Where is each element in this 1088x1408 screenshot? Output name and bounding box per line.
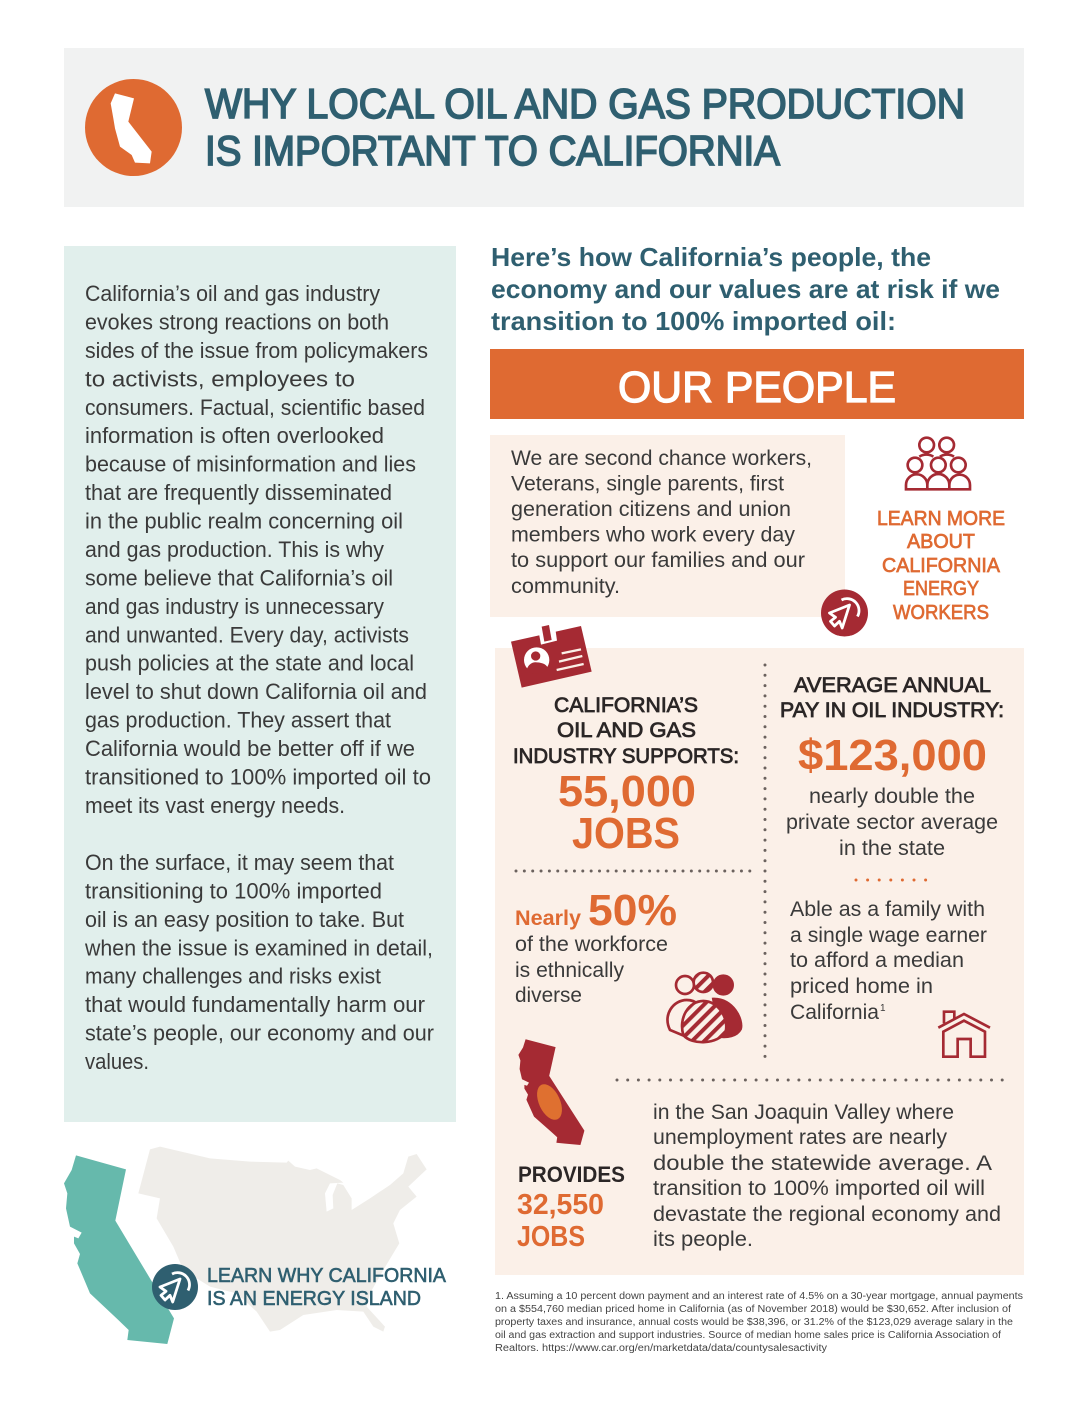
- icon: link arrow: [821, 590, 868, 636]
- panel: who we are: [490, 435, 845, 617]
- stat: nearly 50 percent diverse: diverse: [515, 984, 582, 1007]
- text block: San Joaquin Valley: its people.: [653, 1228, 753, 1251]
- banner: our people: OUR PEOPLE: [618, 363, 896, 412]
- text block: first paragraph: California would be better off if we: [85, 736, 415, 761]
- text block: second paragraph: On the surface, it may seem that: [85, 850, 394, 875]
- panel: statistics: [495, 625, 1024, 1275]
- text block: second paragraph: state’s people, our economy and our: [85, 1021, 434, 1046]
- text block: San Joaquin Valley: in the San Joaquin Valley where: [653, 1101, 954, 1124]
- footnote: Realtors. https://www.car.org/en/marketdata/data/countysalesactivity: [495, 1343, 827, 1354]
- text block: second paragraph: values.: [85, 1049, 149, 1074]
- icon: link arrow: [152, 1264, 198, 1310]
- text block: second paragraph: when the issue is examined in detail,: [84, 935, 433, 960]
- stat: 55,000 jobs: CALIFORNIA’S: [554, 694, 698, 717]
- text block: first paragraph: in the public realm concerning oil: [85, 508, 403, 534]
- callout: learn more link: CALIFORNIA: [882, 555, 1001, 577]
- text block: San Joaquin Valley: unemployment rates are nearly: [653, 1126, 948, 1149]
- stat: 55,000 jobs: [513, 694, 739, 858]
- callout: learn more link: ABOUT: [907, 531, 975, 553]
- icon: California in orange circle: [85, 79, 182, 176]
- stat: nearly 50 percent diverse: [515, 886, 677, 1007]
- callout: energy island link: LEARN WHY CALIFORNIA: [207, 1264, 446, 1287]
- stat: 32,550 jobs: [517, 1162, 625, 1253]
- text block: first paragraph: transitioned to 100% imported oil to: [85, 764, 431, 790]
- panel: who we are: We are second chance workers,: [511, 447, 812, 470]
- panel: who we are: Veterans, single parents, first: [511, 472, 784, 496]
- panel: who we are: community.: [511, 575, 620, 598]
- text block: first paragraph: evokes strong reactions on both: [85, 309, 389, 334]
- header panel: [64, 48, 1024, 207]
- callout: learn more link: WORKERS: [893, 602, 989, 624]
- text block: first paragraph: and gas production. This is why: [85, 537, 384, 562]
- panel: intro text: [64, 246, 456, 1122]
- text block: second paragraph: oil is an easy position to take. But: [85, 907, 404, 932]
- text block: first paragraph: to activists, employees to: [85, 366, 355, 391]
- text block: San Joaquin Valley: devastate the regional economy and: [653, 1203, 1001, 1226]
- stat: average annual pay: $123,000: [798, 731, 987, 780]
- text block: San Joaquin Valley: double the statewide average. A: [653, 1152, 992, 1175]
- stat: average annual pay: [780, 674, 1004, 860]
- stat: 32,550 jobs: 32,550: [517, 1189, 604, 1221]
- callout: energy island link: [207, 1264, 446, 1310]
- footnote: [495, 1291, 1023, 1354]
- text block: first paragraph: because of misinformation and lies: [85, 452, 416, 477]
- stat: average annual pay: nearly double the: [809, 785, 975, 808]
- heading: people, economy and values at risk: transition to 100% imported oil:: [491, 306, 896, 336]
- text block: afford a home: a single wage earner: [790, 924, 987, 947]
- stat: 55,000 jobs: JOBS: [572, 809, 680, 858]
- text block: first paragraph: meet its vast energy needs.: [85, 793, 345, 818]
- text block: second paragraph: that would fundamentally harm our: [85, 992, 425, 1017]
- stat: nearly 50 percent diverse: Nearly: [515, 907, 581, 930]
- text block: first paragraph: push policies at the state and local: [85, 651, 414, 676]
- title: IS IMPORTANT TO CALIFORNIA: [205, 127, 780, 174]
- text block: second paragraph: transitioning to 100% imported: [85, 878, 382, 903]
- heading: people, economy and values at risk: economy and our values are at risk if we: [491, 274, 1000, 304]
- text block: San Joaquin Valley: [653, 1101, 1001, 1251]
- stat: average annual pay: AVERAGE ANNUAL: [794, 674, 991, 697]
- callout: energy island link: IS AN ENERGY ISLAND: [207, 1287, 421, 1310]
- text block: first paragraph: information is often overlooked: [85, 423, 384, 448]
- stat: nearly 50 percent diverse: of the workforce: [515, 933, 668, 956]
- map: San Joaquin Valley: [518, 1039, 584, 1145]
- stat: nearly 50 percent diverse: is ethnically: [515, 959, 624, 982]
- text block: first paragraph: and unwanted. Every day, activists: [85, 622, 409, 647]
- text block: second paragraph: [84, 850, 434, 1074]
- text block: afford a home: 1: [880, 1003, 886, 1014]
- text block: first paragraph: some believe that California’s oil: [85, 565, 393, 590]
- heading: people, economy and values at risk: Here’s how California’s people, the: [491, 242, 931, 272]
- stat: 55,000 jobs: INDUSTRY SUPPORTS:: [513, 745, 739, 768]
- stat: 55,000 jobs: 55,000: [558, 767, 696, 816]
- stat: average annual pay: PAY IN OIL INDUSTRY:: [780, 699, 1004, 722]
- footnote: property taxes and insurance, annual costs would be $38,396, or 31.2% of the $123,029 average salary in the: [495, 1317, 1013, 1328]
- icon: house: [938, 1012, 990, 1057]
- heading: people, economy and values at risk: [491, 242, 1000, 336]
- icon: diverse workforce: [667, 973, 741, 1042]
- footnote: 1. Assuming a 10 percent down payment and an interest rate of 4.5% on a 30-year mortgage, annual payments: [495, 1291, 1023, 1302]
- stat: average annual pay: private sector average: [786, 811, 998, 834]
- footnote: on a $554,760 median priced home in California (as of November 2018) would be $30,652. After inclusion of: [495, 1304, 1011, 1315]
- text block: first paragraph: level to shut down California oil and: [85, 679, 427, 704]
- stat: 55,000 jobs: OIL AND GAS: [557, 719, 696, 742]
- panel: who we are: to support our families and our: [511, 549, 805, 572]
- text block: afford a home: to afford a median: [790, 949, 964, 972]
- map: California: [64, 1155, 174, 1344]
- footnote: oil and gas extraction and support industries. Source of median home sales price is California Association of: [495, 1330, 1001, 1341]
- text block: first paragraph: California’s oil and gas industry: [85, 281, 380, 306]
- panel: who we are: members who work every day: [511, 524, 795, 546]
- text block: afford a home: California: [790, 1001, 879, 1024]
- text block: first paragraph: that are frequently disseminated: [85, 480, 392, 505]
- text block: first paragraph: consumers. Factual, scientific based: [85, 395, 425, 420]
- stat: average annual pay: in the state: [839, 837, 945, 860]
- title: [205, 80, 965, 174]
- panel: who we are: generation citizens and union: [511, 498, 791, 521]
- icon: ID badge: [511, 625, 592, 688]
- text block: afford a home: [790, 898, 987, 1024]
- text block: afford a home: Able as a family with: [790, 898, 985, 921]
- text block: San Joaquin Valley: transition to 100% imported oil will: [653, 1177, 985, 1200]
- stat: nearly 50 percent diverse: 50%: [588, 886, 677, 935]
- text block: first paragraph: gas production. They assert that: [85, 708, 391, 733]
- text block: first paragraph: [85, 281, 431, 818]
- callout: learn more link: ENERGY: [903, 578, 979, 600]
- callout: learn more link: [877, 508, 1005, 624]
- text block: afford a home: priced home in: [790, 975, 933, 998]
- stat: 32,550 jobs: PROVIDES: [518, 1162, 625, 1187]
- stat: 32,550 jobs: JOBS: [517, 1221, 585, 1253]
- icon: group of workers: [905, 438, 971, 489]
- text block: first paragraph: and gas industry is unnecessary: [85, 594, 384, 619]
- map: rest of United States: [138, 1147, 427, 1332]
- callout: learn more link: LEARN MORE: [877, 508, 1005, 530]
- text block: second paragraph: many challenges and risks exist: [85, 964, 381, 989]
- title: WHY LOCAL OIL AND GAS PRODUCTION: [205, 80, 965, 127]
- text block: first paragraph: sides of the issue from policymakers: [85, 338, 428, 363]
- banner: our people: [490, 349, 1024, 419]
- map: California energy island: [64, 1147, 446, 1344]
